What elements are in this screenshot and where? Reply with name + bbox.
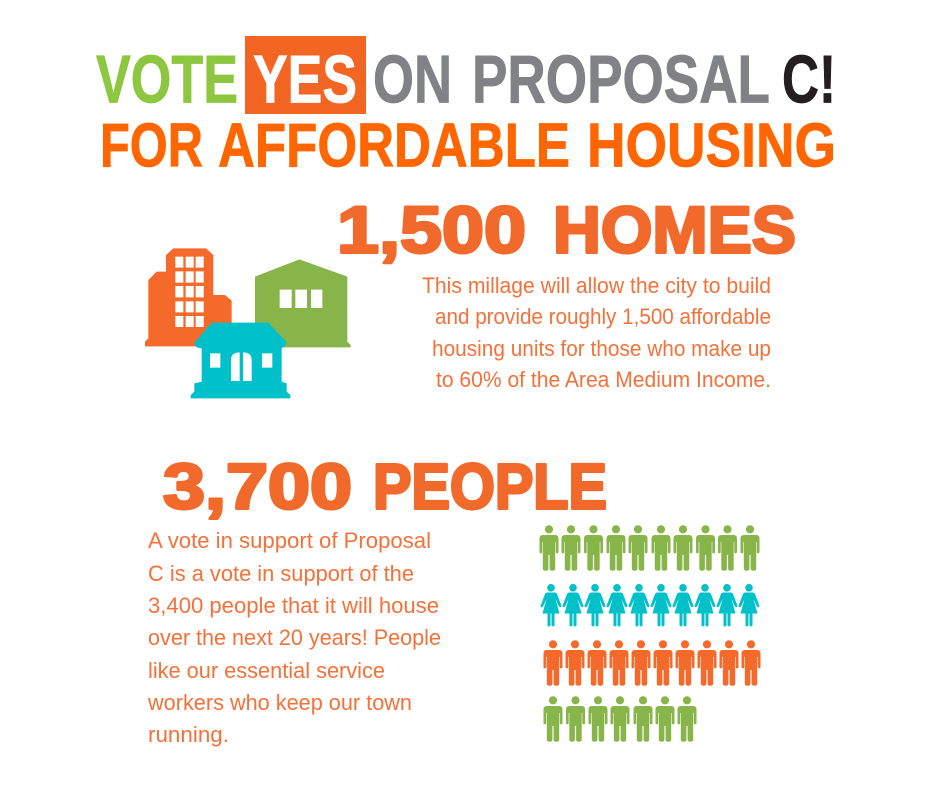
text block: homes description: to 60% of the Area Medium Income. (436, 367, 771, 392)
text block: homes description: housing units for those who make up (432, 336, 771, 361)
highlighted box: YES: YES (253, 42, 357, 118)
subtitle: AFFORDABLE (218, 112, 570, 180)
title word: VOTE: VOTE (96, 42, 238, 118)
subtitle: FOR (100, 112, 203, 180)
text block: homes description: and provide roughly 1,500 affordable (435, 304, 771, 329)
title (96, 36, 836, 180)
subtitle (100, 112, 836, 180)
text block: homes description (422, 273, 771, 392)
text block: people description: over the next 20 years! People (148, 625, 441, 650)
pictogram row: green men (540, 525, 760, 571)
text block: people description: A vote in support of Proposal (148, 528, 431, 553)
title word: PROPOSAL: PROPOSAL (472, 42, 770, 118)
icon: green building (255, 259, 351, 347)
heading: 1,500 homes: 1,500 (337, 192, 526, 266)
heading: 3,700 people: PEOPLE (373, 450, 607, 522)
text block: people description: C is a vote in support of the (148, 561, 414, 586)
heading: 3,700 people (163, 450, 607, 522)
heading: 3,700 people: 3,700 (163, 450, 352, 522)
icon: buildings (145, 248, 351, 398)
subtitle: HOUSING (587, 112, 836, 180)
pictogram: people rows (540, 525, 760, 742)
pictogram row: green men, partial (544, 696, 696, 742)
icon: teal house (191, 323, 290, 398)
heading: 1,500 homes: HOMES (553, 192, 796, 266)
text block: people description: like our essential service (148, 658, 385, 683)
text block: homes description: This millage will allow the city to build (422, 273, 771, 298)
text block: people description: workers who keep our town (147, 690, 412, 715)
icon: orange apartment tower (145, 248, 237, 346)
title word: ON: ON (373, 42, 452, 118)
text block: people description (147, 528, 441, 747)
pictogram row: teal women (541, 584, 759, 626)
title word: C!: C! (782, 42, 836, 118)
pictogram row: orange men (544, 640, 760, 686)
heading: 1,500 homes (337, 192, 796, 266)
text block: people description: 3,400 people that it will house (148, 593, 439, 618)
text block: people description: running. (148, 722, 229, 747)
